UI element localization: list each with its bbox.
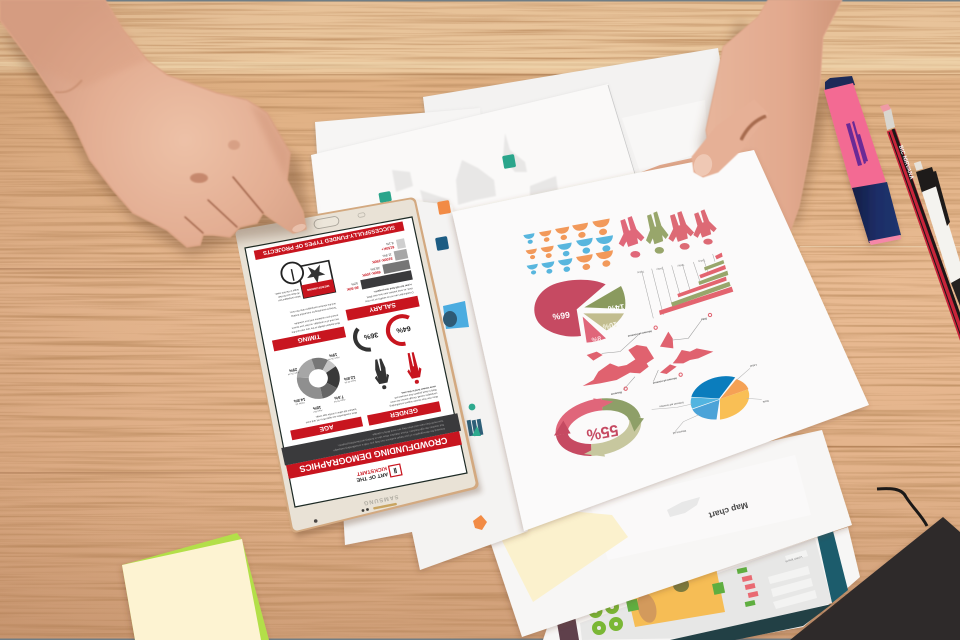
pie chart 66 percent: 10%: [601, 320, 618, 332]
dark blob: [443, 311, 457, 327]
left hand: [0, 0, 312, 255]
ribbon: [877, 489, 927, 526]
circular arrow 55 percent: [554, 398, 644, 457]
circular arrow 55 percent: 55%: [585, 421, 620, 443]
mint person: [472, 426, 481, 436]
age labels: 19%: [328, 352, 338, 359]
wrist crease: [55, 80, 82, 92]
pen grip: [951, 278, 960, 306]
right hand: [639, 0, 842, 232]
bar chart: [636, 253, 733, 318]
age labels: 12.8%: [343, 375, 356, 382]
salary text: Crowdfunders are not as wealthy as you may: [364, 291, 414, 303]
yellow sticky note: [122, 539, 261, 640]
world map: Data: [700, 317, 707, 322]
side text: [274, 288, 301, 302]
timing text: around your audience and your schedule.: [293, 314, 338, 325]
pen barrel: [922, 186, 960, 284]
logo: [354, 462, 402, 484]
map chart caption: Map chart: [708, 500, 749, 521]
gender text: campaigns overall, though women are more: [389, 392, 437, 404]
age heading: AGE: [318, 423, 334, 432]
dark teal bottom band: [670, 604, 832, 640]
grey map shapes: [392, 133, 558, 212]
world map: Internet ad revenue: [652, 376, 677, 385]
age labels: [285, 350, 361, 415]
blue pie chart: Internet ad: [672, 429, 687, 435]
navy cap: [852, 182, 901, 243]
navy tag: [435, 236, 449, 251]
logo: KICKSTART: [355, 465, 387, 477]
top edge strip: [0, 0, 960, 2]
knuckle shadow: [190, 173, 208, 183]
panel label: SECTION: [649, 109, 668, 116]
thumb: [692, 100, 768, 177]
bar chart: Today: [697, 258, 706, 264]
salary section: 8.1%: [386, 241, 394, 246]
age section: Ages 35-44: [327, 356, 340, 361]
pencil brand: BIC NIRVANA: [897, 145, 914, 180]
age text: backers fall within a similar age range.: [315, 408, 357, 419]
salary section: 28.3%: [370, 266, 380, 272]
bar chart: Today: [677, 263, 685, 268]
yellow photo: [628, 568, 725, 627]
eraser: [880, 104, 891, 112]
finger under paper: [639, 158, 700, 178]
pie chart 66 percent: 66%: [552, 310, 570, 322]
36 percent gauge: 36%: [362, 330, 379, 341]
pencil: [880, 104, 960, 370]
age section: Ages 45-54: [344, 379, 356, 384]
gender section: [348, 312, 441, 426]
form fields: [768, 550, 817, 609]
gold bar: [373, 503, 397, 510]
age text: Most crowdfunders are aged 25 to 34, and most: [305, 411, 357, 424]
blue pie chart: [652, 363, 769, 435]
orange tag: [473, 515, 487, 530]
large figures: [614, 208, 718, 258]
lighter panel: [590, 455, 811, 560]
world map: [583, 313, 713, 397]
age section: Ages 55-64: [333, 398, 346, 403]
dark dots: [362, 508, 369, 512]
salary labels: $100K-150K: [371, 256, 393, 264]
timing text: Timing is everything for successful funding: [290, 306, 337, 318]
middle sheet: map chart: [478, 430, 852, 637]
home button: [313, 216, 340, 229]
tablet: [240, 203, 482, 538]
salary heading: SALARY: [368, 301, 396, 313]
bottom edge strip: [0, 638, 960, 640]
screen: [245, 217, 467, 507]
finger separators: [185, 177, 263, 233]
clock icon: [279, 261, 305, 285]
timing text: Most backers pledge at the very start and the: [291, 321, 340, 334]
highlighter: [824, 76, 901, 245]
notebook cover: [790, 517, 960, 640]
world map sheet: [311, 84, 636, 250]
gender text: [386, 385, 438, 407]
barcode: [846, 121, 868, 166]
bezel: [240, 204, 471, 526]
grey panel: [580, 538, 832, 640]
age labels: 18%: [312, 405, 322, 411]
bottom heading: SUCCESSFULLY-FUNDED TYPES OF PROJECTS: [262, 224, 395, 255]
teal side band: [817, 531, 848, 603]
gender text: More men than women support crowdfunding: [389, 395, 438, 407]
camera dot: [314, 519, 318, 523]
title band: CROWDFUNDING DEMOGRAPHICS: [298, 435, 448, 474]
pen clip: [932, 171, 950, 226]
age labels: 14.8%: [293, 397, 306, 404]
age section: Under 25: [295, 401, 305, 406]
pen top: [916, 167, 938, 193]
back sheet A: [423, 48, 740, 235]
side text: 30 days and hit their: [277, 291, 300, 298]
world map: Internet ad revenue: [627, 329, 652, 338]
palm: [706, 0, 842, 232]
intro band: that reaches the right backers. These statistics show who is funding and launching projects,: [337, 423, 444, 448]
pink body: [824, 83, 886, 190]
blue pie chart: Internet ad revenue: [659, 401, 684, 409]
orange tag: [437, 200, 451, 215]
age labels: 7.5%: [334, 394, 344, 401]
logo: Ⅱ: [393, 466, 398, 474]
salary labels: $0-50K: [346, 285, 359, 291]
64 percent gauge: 64%: [395, 324, 411, 335]
cap top: [825, 76, 855, 92]
age section: Ages 25-34: [287, 371, 300, 376]
plant in photo: [673, 578, 689, 592]
timing text: very end of a campaign, so plan your launch: [291, 317, 339, 330]
dog in photo: [634, 591, 660, 625]
hand shadow: [0, 30, 312, 255]
pale panels: [622, 100, 708, 172]
world map: Revenue: [610, 390, 622, 397]
sticky notes: [122, 533, 269, 640]
knuckle mark: [228, 140, 240, 150]
people icons: [467, 419, 483, 436]
blue box: [443, 301, 469, 329]
salary bars: [353, 238, 413, 289]
left lower sheet: [343, 200, 528, 570]
age donut chart: [300, 361, 337, 396]
intro band: Knowing the demographics of your target audience can help you craft a crowdfunding campaign: [333, 427, 445, 453]
brand name: SAMSUNG: [362, 493, 399, 506]
calendar icon: MICROFUNDING: [306, 284, 330, 292]
salary labels: $50K-100K: [361, 270, 381, 277]
screen infographic: [240, 219, 468, 497]
side text: target in the first week.: [274, 288, 299, 296]
age labels: 29%: [288, 367, 298, 374]
thumbnail: [691, 152, 715, 178]
age section: [276, 350, 366, 440]
small figures rows: [523, 219, 616, 275]
clicker: [914, 161, 923, 171]
salary text: [362, 283, 414, 303]
salary section: [333, 238, 420, 321]
mint dot: [469, 404, 475, 410]
hand shape: [0, 0, 306, 247]
hand shadow: [700, 20, 830, 230]
shaded finger side: [250, 104, 290, 180]
pink tip: [869, 235, 901, 245]
ferrule: [883, 108, 895, 130]
pie chart 66 percent: 14%: [607, 302, 625, 314]
bar chart: Today: [636, 270, 645, 275]
salary text: think, as most backers earn less than $50K: [366, 287, 413, 299]
gold rim: [241, 203, 473, 527]
timing text: and the shortest campaigns raise the most.: [289, 302, 336, 314]
timing heading: TIMING: [297, 332, 321, 344]
back sheet B: [315, 108, 490, 200]
green sticky note: [122, 533, 269, 640]
green circle icons: [591, 602, 620, 632]
paper sheet: [452, 150, 869, 531]
age section: Ages 65+: [312, 409, 323, 414]
field label: Lorem ipsum: [785, 555, 803, 564]
front paper with charts: [452, 100, 869, 531]
timing text: [287, 302, 340, 334]
gender heading: GENDER: [389, 406, 418, 418]
logo: ART OF THE: [355, 471, 389, 483]
side text: Most campaigns last: [278, 295, 301, 302]
bar chart: Today: [656, 266, 664, 272]
salary text: a year but still fund new projects.: [373, 283, 412, 293]
green square tags: [626, 582, 725, 612]
intro band: [281, 413, 461, 465]
pen: [914, 161, 960, 306]
yellow sheet: [483, 503, 628, 602]
salary labels: $150K+: [381, 245, 395, 251]
tablet shadow: [240, 205, 482, 538]
sensor: [358, 212, 365, 218]
notebook: [790, 489, 960, 640]
pie chart 66 percent: 8%: [591, 334, 602, 343]
timing section: [257, 255, 346, 351]
teal tag: [378, 191, 392, 203]
salary section: 52%: [351, 281, 358, 286]
forearm tone: [0, 0, 147, 88]
dark person: [371, 358, 392, 391]
fold line: [608, 85, 635, 174]
blue pie chart: Data: [762, 399, 769, 404]
map thumbnail: [667, 497, 700, 517]
purple band: [557, 616, 579, 640]
salary labels: [339, 245, 401, 291]
blue pie chart: Label: [749, 363, 757, 368]
gender text: more women fund in this area.: [400, 385, 436, 395]
pie chart 66 percent: [534, 280, 625, 343]
red person: [404, 351, 424, 385]
gender text: likely to back projects that succeed and: [394, 388, 437, 399]
teal tag: [502, 154, 516, 169]
toggle switches: [737, 567, 759, 607]
fingernail: [291, 222, 307, 234]
palm crease: [741, 116, 766, 140]
bottom sheet: app layout: [543, 527, 860, 640]
salary section: 11.9%: [382, 252, 392, 258]
intro band: how much they earn and when they are most likely to pledge.: [371, 419, 444, 437]
